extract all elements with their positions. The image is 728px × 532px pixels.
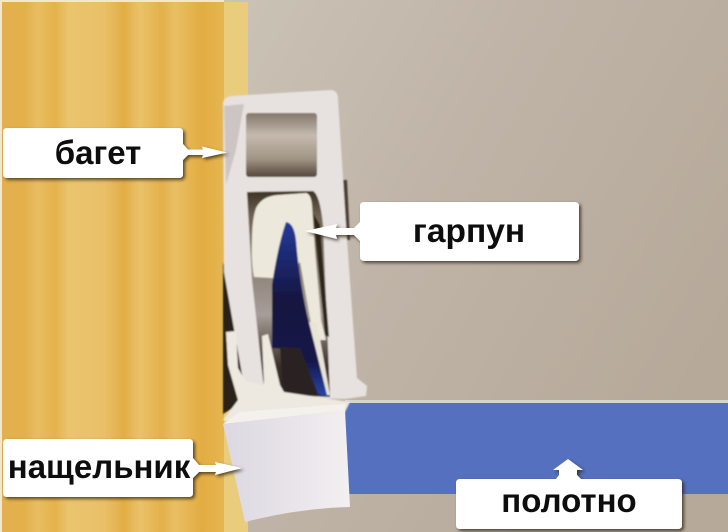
cover clip legs bbox=[223, 331, 350, 425]
label: полотно bbox=[456, 459, 682, 529]
dark gap by wall bbox=[223, 262, 246, 414]
cover strip bbox=[223, 404, 350, 522]
label: нащельник bbox=[3, 439, 242, 497]
background: wooden wall bbox=[2, 2, 224, 532]
hollow chamber bbox=[246, 113, 317, 177]
marble shading bbox=[224, 104, 244, 185]
blue canvas strip bbox=[345, 400, 728, 494]
label: багет: багет bbox=[55, 134, 141, 171]
label: полотно: полотно bbox=[501, 482, 637, 519]
label: гарпун: гарпун bbox=[413, 213, 525, 250]
background: grey wall bbox=[224, 0, 728, 532]
baguette profile bbox=[223, 90, 367, 425]
harpoon blue canvas edge bbox=[272, 222, 329, 397]
lower cavity bbox=[247, 191, 330, 397]
label: гарпун bbox=[305, 202, 579, 261]
dark shadow behind profile bbox=[342, 180, 350, 240]
harpoon white blade bbox=[309, 322, 330, 395]
background: light wood edge bbox=[224, 2, 248, 532]
dark cavity base bbox=[280, 347, 318, 394]
baguette outer body bbox=[223, 90, 367, 399]
label: нащельник: нащельник bbox=[8, 448, 191, 485]
label: багет bbox=[3, 128, 227, 178]
harpoon white body bbox=[252, 193, 326, 340]
right dark strip bbox=[313, 213, 329, 337]
